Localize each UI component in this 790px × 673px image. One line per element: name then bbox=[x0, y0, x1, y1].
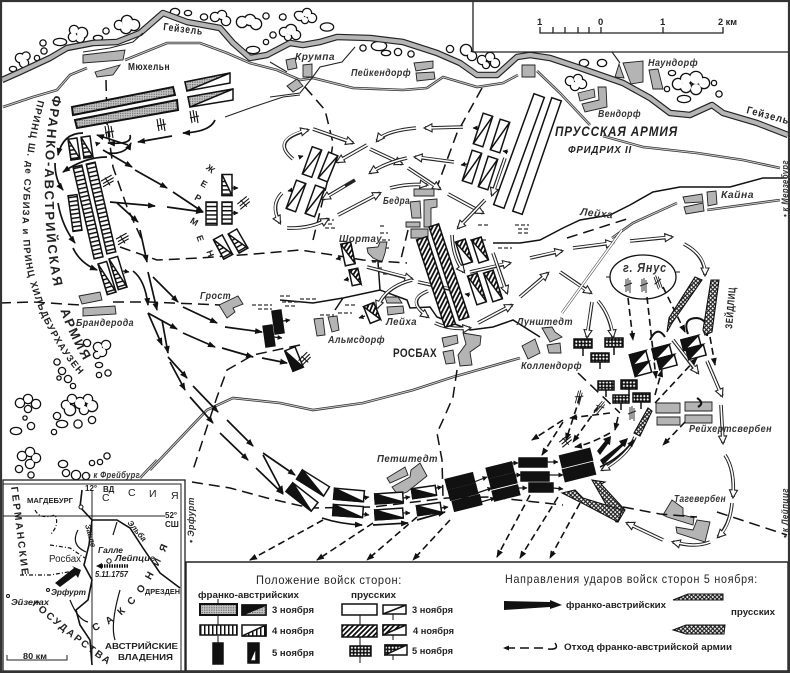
main map labels: Вендорф bbox=[598, 108, 641, 120]
legend: retreat bbox=[503, 642, 732, 652]
legend: French column: франко-австрийских bbox=[198, 590, 299, 600]
main map labels: Лейха bbox=[579, 206, 614, 221]
inset map: Germany and Saxony: ГОСУДАРСТВА bbox=[32, 600, 109, 664]
legend: dates: 3 ноября bbox=[272, 605, 314, 616]
settlement: Шортау bbox=[367, 242, 387, 262]
letters: Жермен: Р bbox=[193, 192, 203, 204]
legend: Prussian arrows bbox=[673, 594, 775, 634]
Prussian hatched units 4 November bbox=[341, 224, 502, 327]
settlement: Росбах bbox=[442, 333, 481, 366]
settlement: Коллендорф bbox=[522, 327, 562, 359]
Prussian white arrows bbox=[275, 127, 733, 545]
inset map: Germany and Saxony: 12° bbox=[85, 484, 97, 493]
settlement: Кайна bbox=[683, 191, 717, 214]
legend: French arrow bbox=[504, 600, 666, 610]
settlement: Бедра bbox=[406, 189, 437, 238]
French split units 4 November bbox=[68, 136, 248, 295]
main map labels: Лунштедт bbox=[516, 316, 573, 328]
hill: Янус: г. Янус bbox=[623, 260, 667, 275]
inset map: Germany and Saxony: СШ bbox=[165, 520, 179, 529]
army label along curve: ПРИНЦ Ш. де СУБИЗА и ПРИНЦ ХИЛЬДБУРХАУЗЕН bbox=[22, 100, 84, 374]
legend: French column bbox=[198, 590, 299, 664]
legend: Prussian column: прусских bbox=[351, 590, 396, 600]
settlement: Крумпа bbox=[286, 58, 312, 92]
settlement: Рейхертсвербен bbox=[656, 402, 712, 425]
French line bars 3 November bbox=[72, 73, 233, 128]
inset map: Germany and Saxony: Галле bbox=[98, 546, 124, 555]
river: Leykha bbox=[280, 178, 787, 337]
hill: Янус bbox=[606, 255, 680, 299]
scale box frame bbox=[473, 2, 788, 52]
main map labels: Крумпа bbox=[295, 51, 335, 63]
forests bbox=[10, 9, 722, 479]
main map labels: Тагевербен bbox=[674, 493, 726, 505]
Franco-Austrian thin attack arrows bbox=[55, 120, 445, 525]
main map labels bbox=[76, 21, 790, 543]
main map labels: Пейкендорф bbox=[351, 67, 411, 79]
main map labels: Брандерода bbox=[76, 317, 134, 329]
inset map: Germany and Saxony: САКСОНИЯ bbox=[92, 544, 168, 630]
legend: dates: 3 ноября bbox=[412, 605, 453, 616]
inset map: Germany and Saxony: Я bbox=[171, 490, 179, 502]
inset map: Germany and Saxony: С bbox=[102, 492, 110, 504]
legend: dates: 5 ноября bbox=[272, 648, 314, 659]
legend: dates: 4 ноября bbox=[413, 626, 454, 637]
main map labels: Гейзель bbox=[163, 21, 204, 38]
letters: Жермен: Е bbox=[194, 234, 206, 243]
main map labels: Кайна bbox=[721, 189, 754, 201]
legend: Prussian arrows: прусских bbox=[731, 607, 775, 617]
scale bar bbox=[537, 17, 737, 33]
inset map: Germany and Saxony: Эльба bbox=[125, 519, 149, 544]
inset map: Germany and Saxony: ВЛАДЕНИЯ bbox=[118, 652, 173, 662]
main map labels: Мюхельн bbox=[128, 62, 170, 73]
letters: Жермен: М bbox=[189, 216, 200, 228]
main map labels: • Эрфурт bbox=[186, 497, 197, 543]
inset map: Germany and Saxony: Росбах bbox=[49, 553, 81, 565]
inset map: Germany and Saxony: 52° bbox=[165, 511, 177, 520]
main map labels: ЗЕЙДЛИЦ bbox=[722, 286, 739, 329]
roads bbox=[3, 33, 780, 478]
main map labels: ПРУССКАЯ АРМИЯ bbox=[555, 123, 678, 139]
legend: dates: 5 ноября bbox=[412, 646, 453, 657]
settlements bbox=[79, 50, 717, 542]
inset map: Germany and Saxony: АВСТРИЙСКИЕ bbox=[105, 640, 178, 651]
inset map: Germany and Saxony: Лейпциг bbox=[114, 554, 156, 563]
inset map: Germany and Saxony: Эйзенах bbox=[11, 598, 50, 607]
settlement: Лейха bbox=[385, 297, 404, 315]
inset map: Germany and Saxony: Эрфурт bbox=[51, 588, 86, 597]
settlement: Наундорф bbox=[615, 61, 663, 89]
scale bar: 1 bbox=[537, 17, 543, 28]
retreat dashed arrows bbox=[250, 287, 715, 560]
letters: Жермен: Е bbox=[199, 178, 209, 190]
legend heading: positions: Положение войск сторон: bbox=[256, 573, 402, 587]
main map labels: Коллендорф bbox=[521, 360, 582, 372]
settlement: Альмсдорф bbox=[314, 316, 339, 336]
scale bar: 2 км bbox=[718, 17, 737, 28]
small unit direction arrows bbox=[96, 128, 563, 515]
settlement: Мюхельн bbox=[83, 50, 125, 77]
black thick arrows bbox=[597, 436, 634, 467]
inset map: Germany and Saxony: 80 км bbox=[23, 652, 47, 661]
dashed roads and retreat lines bbox=[0, 80, 787, 535]
main map labels: Наундорф bbox=[648, 57, 698, 69]
settlement: Брандерода bbox=[79, 292, 116, 316]
inset map: Germany and Saxony: ДРЕЗДЕН bbox=[145, 587, 180, 596]
legend: Prussian column bbox=[342, 590, 407, 663]
main map labels: Шортау bbox=[339, 233, 383, 245]
settlement: Пейкендорф bbox=[414, 61, 535, 81]
inset map: Germany and Saxony: ВД bbox=[103, 485, 115, 494]
legend: retreat: Отход франко-австрийской армии bbox=[564, 642, 732, 652]
river: Geisel bbox=[2, 13, 788, 135]
Prussian black-and-white units at the right bbox=[629, 318, 708, 407]
panel: legend bbox=[186, 562, 788, 671]
settlement: Тагевербен bbox=[663, 500, 710, 542]
small formation marks bbox=[100, 110, 636, 448]
main map labels: Петштедт bbox=[377, 453, 438, 465]
inset map: Germany and Saxony: ГЕРМАНСКИЕ bbox=[11, 486, 29, 574]
legend: dates bbox=[272, 605, 454, 659]
main map labels: Бедра bbox=[383, 195, 410, 207]
scale bar: 1 bbox=[660, 17, 666, 28]
inset map: Germany and Saxony: И bbox=[149, 488, 157, 500]
main map labels: Грост bbox=[200, 290, 231, 302]
main map labels: Альмсдорф bbox=[327, 334, 385, 346]
letters: Жермен: Н bbox=[204, 249, 216, 258]
French ladder columns 4 November bbox=[68, 162, 232, 259]
Prussian white units 3 November bbox=[286, 94, 561, 217]
hatched Prussian attack arrows bbox=[562, 277, 719, 522]
legend heading: attack directions: Направления ударов войск сторон 5 ноября: bbox=[505, 572, 758, 586]
Prussian dotted-black units 5 November bbox=[574, 338, 650, 410]
inset map: Germany and Saxony bbox=[2, 479, 186, 671]
letters: Жермен bbox=[189, 162, 217, 258]
main map labels: ФРИДРИХ II bbox=[568, 145, 632, 156]
settlement: Грост bbox=[219, 296, 243, 318]
letters: Жермен: Ж bbox=[203, 162, 217, 176]
main map labels: РОСБАХ bbox=[393, 346, 437, 360]
settlement: Петштедт bbox=[387, 463, 427, 495]
legend: dates: 4 ноября bbox=[272, 626, 314, 637]
marsh bbox=[252, 220, 530, 315]
main map labels: • к Фрейбург bbox=[88, 470, 140, 481]
black French units 5 November bbox=[263, 310, 595, 520]
inset map: Germany and Saxony: МАГДЕБУРГ bbox=[27, 496, 74, 505]
inset map: Germany and Saxony: С bbox=[128, 487, 136, 499]
settlement: Вендорф bbox=[578, 87, 607, 112]
inset map: Germany and Saxony: Заале bbox=[83, 523, 98, 549]
legend: French arrow: франко-австрийских bbox=[566, 600, 666, 610]
inset map: Germany and Saxony: 5.11.1757 bbox=[95, 570, 129, 579]
main map labels: Рейхертсвербен bbox=[689, 423, 772, 435]
scale bar: 0 bbox=[598, 17, 603, 28]
army label along curve: ФРАНКО-АВСТРИЙСКАЯ АРМИЯ bbox=[44, 96, 91, 360]
main map labels: Лейха bbox=[385, 316, 417, 328]
